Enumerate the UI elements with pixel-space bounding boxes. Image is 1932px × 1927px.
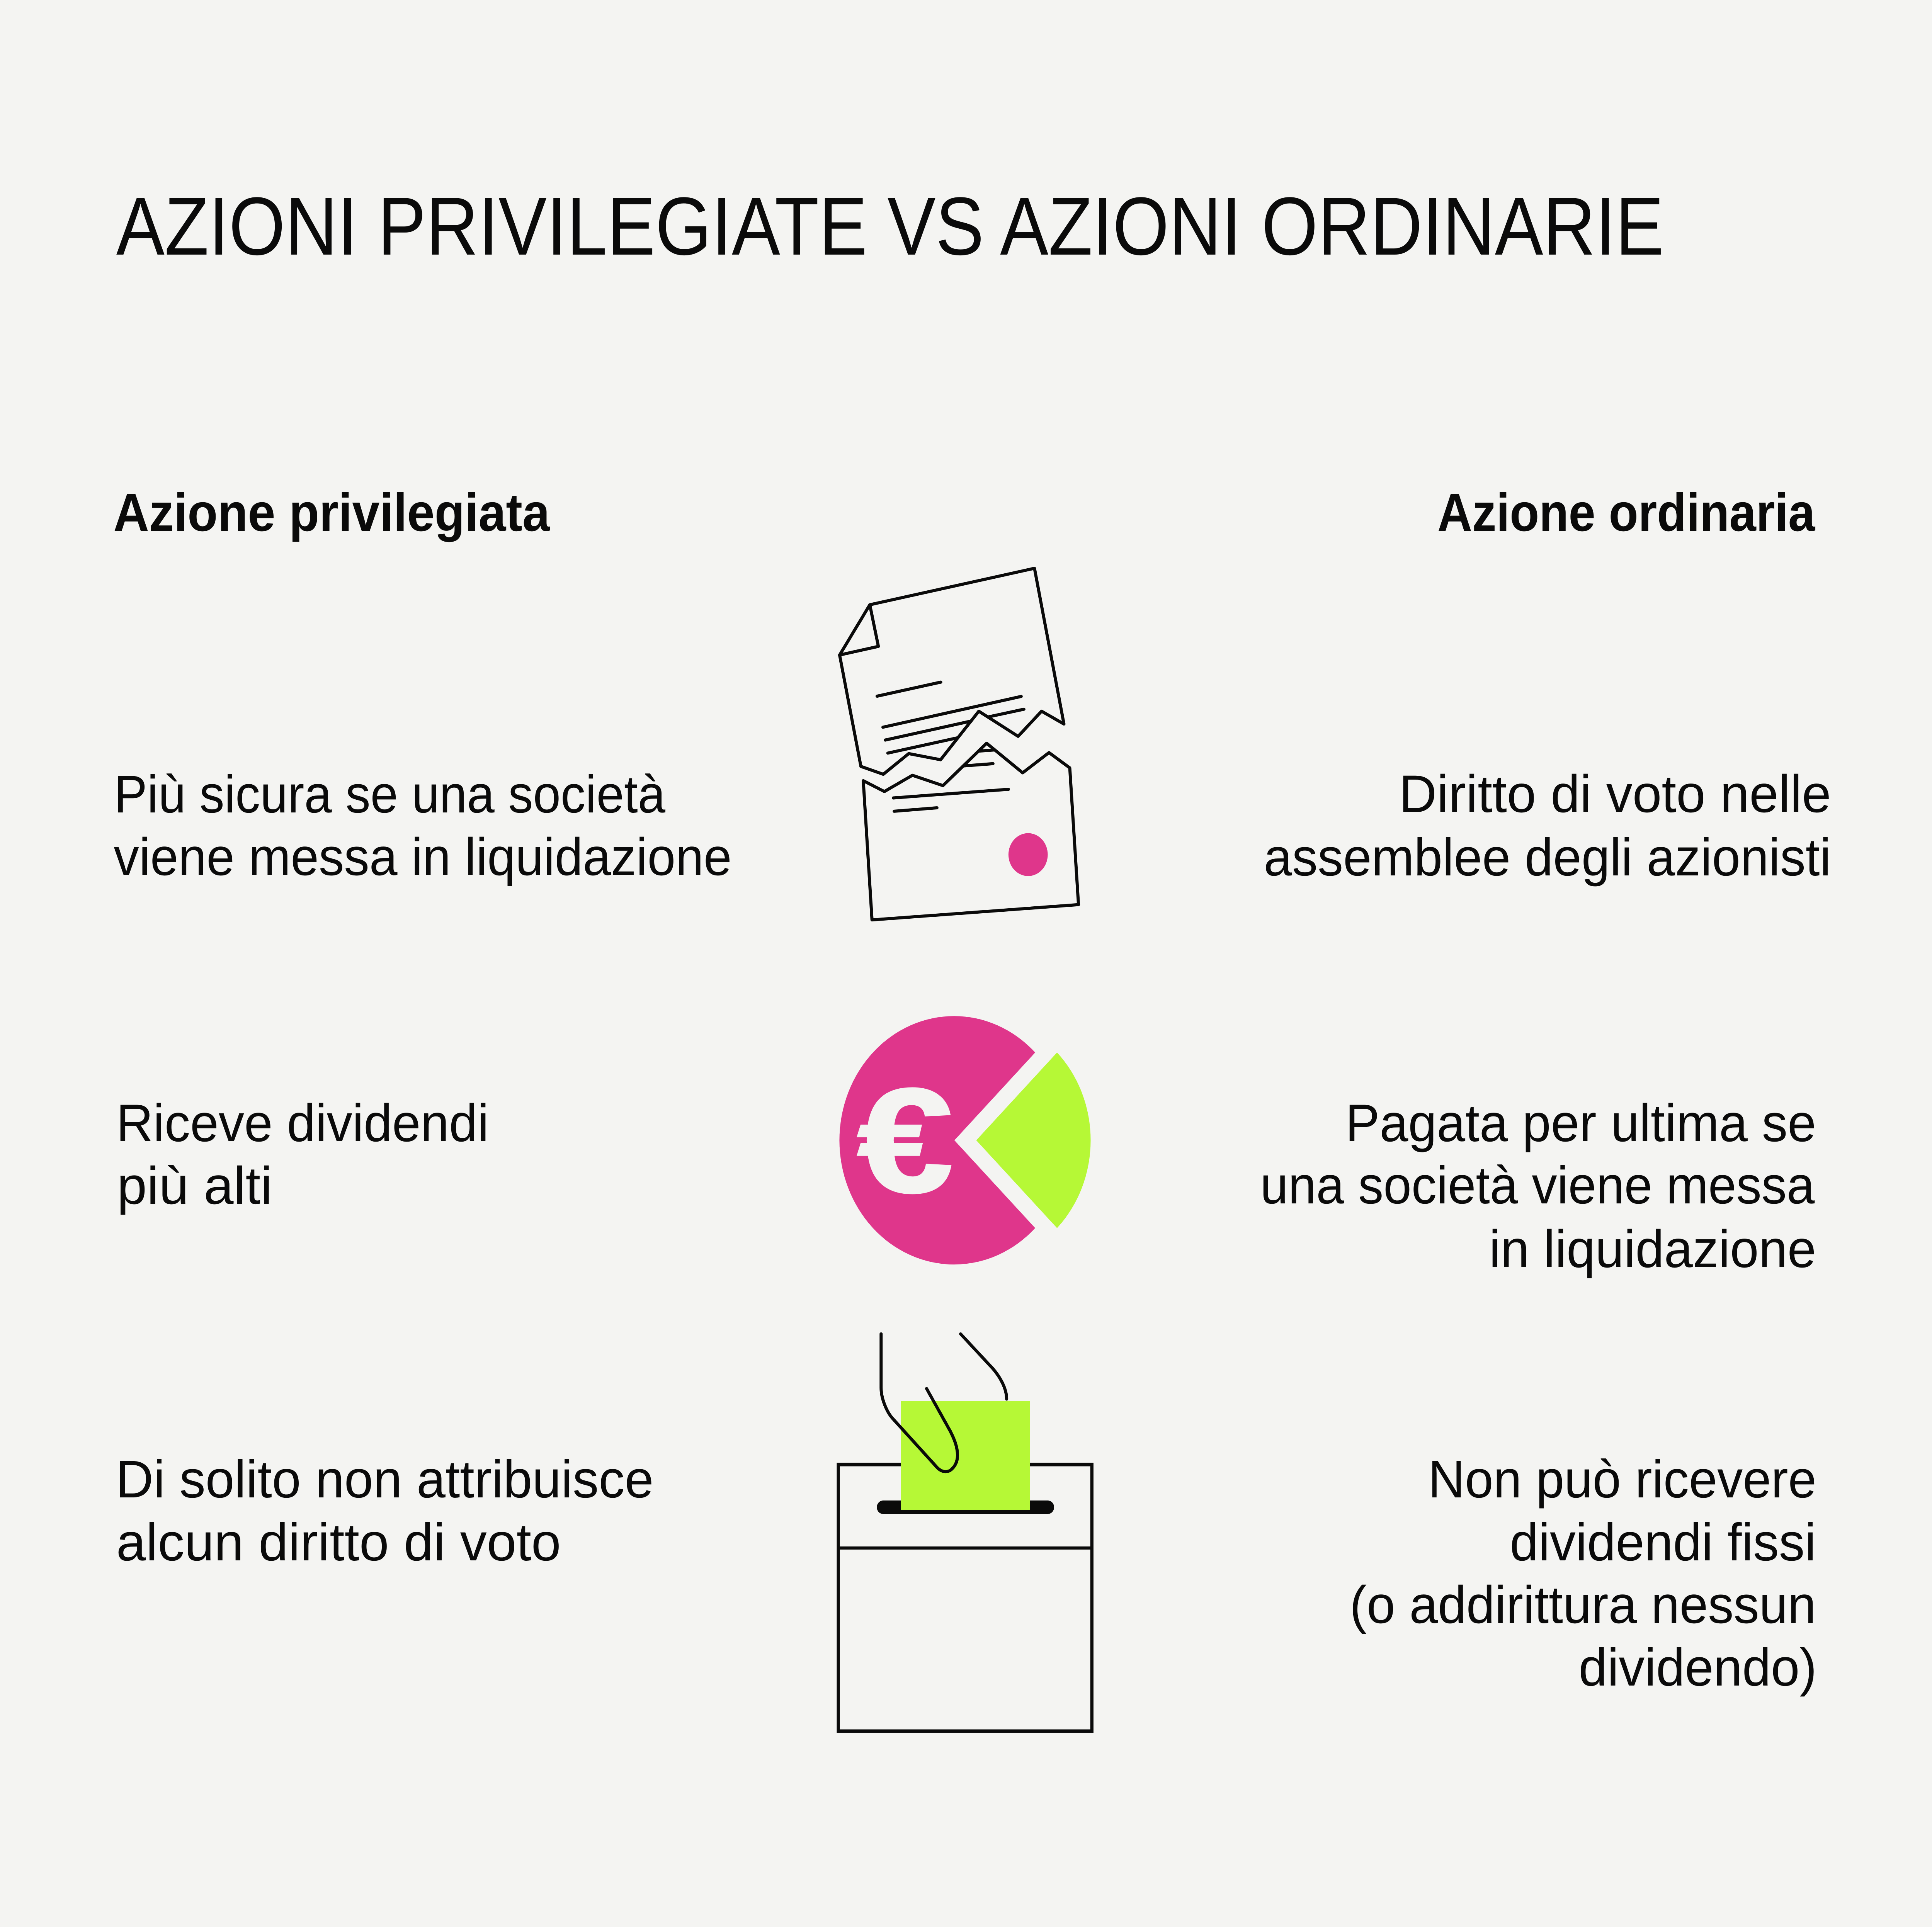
box lid line <box>838 1546 1092 1550</box>
pink seal <box>1009 833 1048 876</box>
text block: left row 3: alcun diritto di voto <box>116 1512 561 1572</box>
document upper half <box>840 568 1064 774</box>
text block: right row 1 <box>1264 764 1831 887</box>
ballot paper <box>901 1401 1030 1510</box>
text block: right row 3: (o addirittura nessun <box>1350 1575 1816 1634</box>
text block: left row 1: Più sicura se una società <box>114 765 666 824</box>
text block: right row 3: Non può ricevere <box>1428 1449 1816 1509</box>
text block: right row 3 <box>1350 1449 1817 1697</box>
pink slice <box>839 1016 1035 1264</box>
text block: right row 2: una società viene messa <box>1260 1156 1815 1215</box>
text block: left row 3: Di solito non attribuisce <box>116 1449 654 1509</box>
folded corner <box>840 605 878 655</box>
slot <box>877 1500 1054 1514</box>
text block: left row 1: viene messa in liquidazione <box>114 827 732 886</box>
text lines lower <box>893 750 1009 811</box>
hand <box>881 1334 1007 1472</box>
box <box>838 1465 1092 1731</box>
text block: right row 2: Pagata per ultima se <box>1345 1093 1816 1152</box>
icon: euro pie chart <box>839 1016 1091 1264</box>
text block: right row 1: assemblee degli azionisti <box>1264 828 1831 887</box>
document lower half <box>863 743 1078 920</box>
text block: right row 3: dividendi fissi <box>1510 1512 1816 1572</box>
text block: right row 2 <box>1260 1093 1816 1278</box>
text block: left row 2 <box>116 1093 489 1215</box>
heading: azione privilegiata: Azione privilegiata <box>113 483 550 542</box>
heading: azione ordinaria: Azione ordinaria <box>1437 483 1815 542</box>
title: AZIONI PRIVILEGIATE VS AZIONI ORDINARIE <box>116 180 1664 272</box>
icon: torn document <box>840 568 1078 920</box>
text block: left row 3 <box>116 1449 654 1572</box>
text block: left row 1 <box>114 765 732 886</box>
euro sign: € <box>857 1058 953 1223</box>
lime slice <box>976 1052 1091 1228</box>
text block: left row 2: più alti <box>117 1156 272 1215</box>
text block: left row 2: Riceve dividendi <box>116 1093 489 1152</box>
text block: right row 3: dividendo) <box>1578 1638 1817 1697</box>
icon: ballot box <box>838 1334 1092 1731</box>
text block: right row 2: in liquidazione <box>1489 1219 1816 1278</box>
text lines upper <box>877 682 1024 753</box>
text block: right row 1: Diritto di voto nelle <box>1399 764 1831 823</box>
